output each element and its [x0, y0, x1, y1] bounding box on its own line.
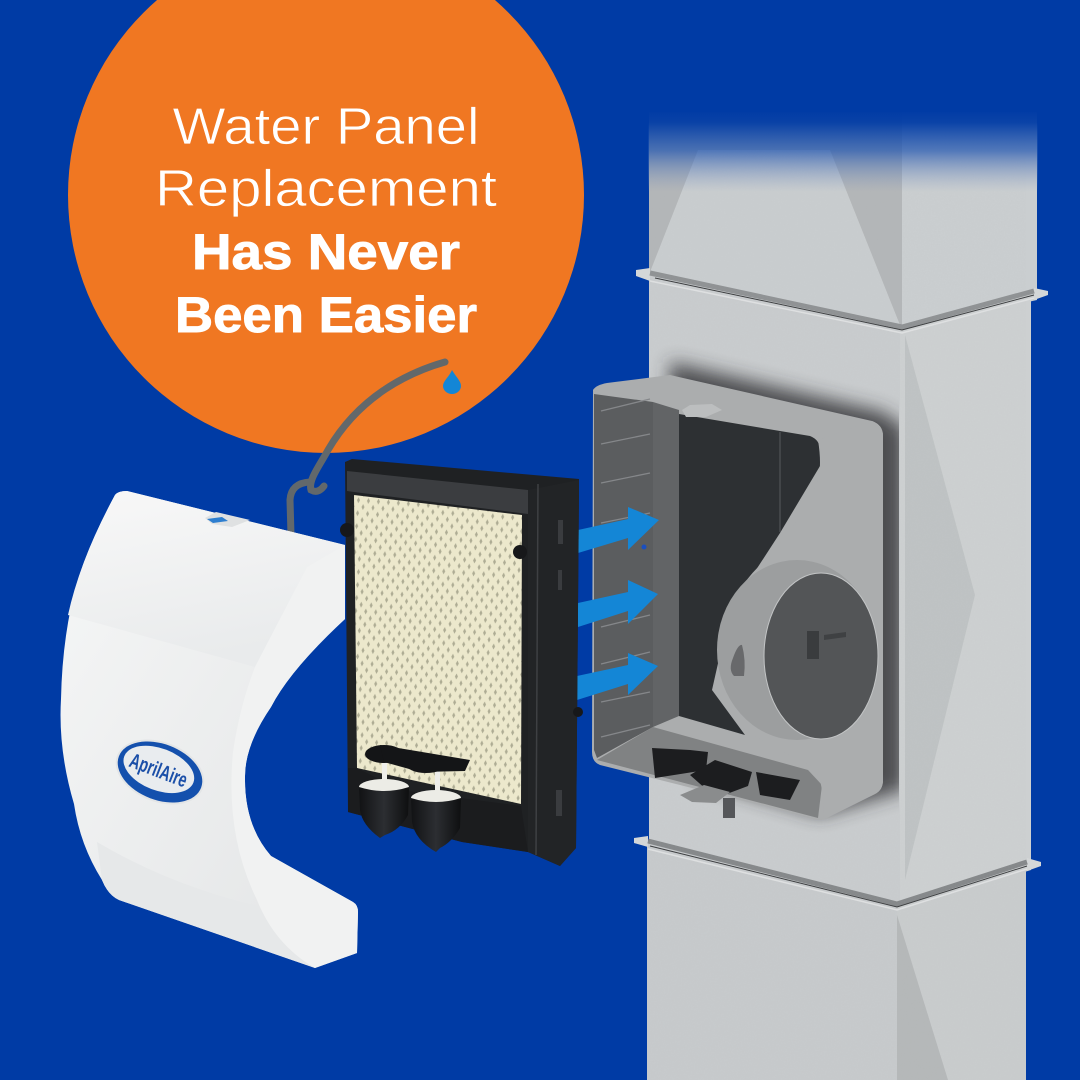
frame body — [345, 459, 579, 866]
bottom clips — [652, 748, 800, 800]
title: Been Easier — [175, 287, 477, 343]
AprilAire logo badge: AprilAire — [126, 749, 190, 792]
side knobs — [340, 523, 583, 717]
collar details — [731, 631, 846, 676]
white stems — [382, 758, 440, 798]
cover body — [61, 491, 358, 968]
bottom inner tray — [597, 727, 822, 818]
title — [155, 98, 498, 343]
dark back panel — [679, 414, 820, 735]
cover top face — [68, 491, 345, 667]
duct texture — [650, 125, 1026, 1080]
cup left — [359, 779, 409, 838]
cover lower face — [97, 842, 315, 968]
back panel divider — [779, 432, 781, 532]
back strip — [653, 402, 679, 727]
tab on top lip — [682, 404, 722, 417]
bottom bracket — [680, 785, 730, 803]
duct lower flange — [634, 836, 1041, 910]
white humidifier cover — [61, 491, 358, 968]
AprilAire logo badge — [106, 728, 214, 816]
filter mesh pad — [354, 495, 522, 804]
collar opening — [764, 573, 878, 739]
droplet on wall — [642, 544, 646, 550]
round collar — [717, 560, 877, 740]
latch window — [207, 517, 228, 523]
cover right band — [231, 545, 358, 968]
tray bottom bar — [348, 768, 528, 852]
title: Water Panel — [172, 98, 480, 156]
title: Replacement — [155, 160, 498, 218]
side highlight — [536, 484, 538, 855]
bottom peg — [723, 798, 735, 818]
cup right — [411, 790, 461, 852]
water panel frame — [340, 459, 583, 866]
duct upper flange — [636, 268, 1048, 333]
air duct — [634, 110, 1048, 1080]
wall ribs — [601, 399, 650, 737]
frame top bar — [347, 471, 528, 514]
title: Has Never — [192, 224, 460, 280]
shadow of base on duct — [670, 362, 905, 815]
humidifier base mounted on duct — [592, 375, 883, 820]
arrow 1 — [578, 507, 659, 553]
pad holder arms — [365, 745, 470, 773]
water drop — [443, 370, 461, 394]
orange title circle — [68, 0, 584, 453]
base left inner wall — [594, 394, 653, 758]
side slots — [556, 520, 563, 816]
arrow 2 — [578, 580, 658, 627]
water tube — [290, 362, 445, 535]
duct lower section — [647, 842, 1026, 1080]
duct top fade — [648, 110, 1038, 192]
frame side rail — [528, 480, 579, 866]
base outer shell — [592, 375, 883, 820]
arrow 3 — [577, 653, 658, 700]
right body sweep — [718, 421, 883, 820]
duct upper section — [649, 112, 1037, 330]
duct middle section — [649, 272, 1031, 910]
flow arrows — [577, 507, 659, 700]
cover latch — [205, 512, 250, 527]
